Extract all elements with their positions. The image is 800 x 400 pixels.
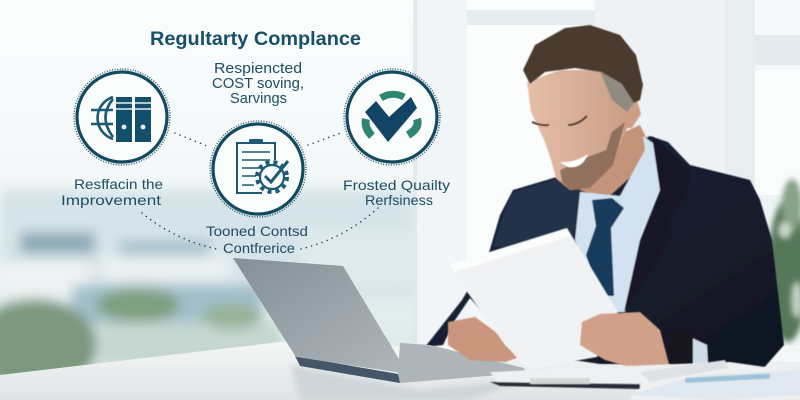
- watch: [670, 331, 693, 367]
- ear: [620, 96, 641, 128]
- businessman: [425, 25, 784, 370]
- lapel: [624, 136, 690, 312]
- icon: clipboard and gear check: [210, 121, 306, 217]
- label: improvement: [61, 176, 163, 208]
- title: Regultarty Complance: [150, 28, 361, 50]
- label: quality: [343, 177, 450, 208]
- label: conference: Contfrerice: [223, 240, 295, 256]
- label: improvement: Improvement: [61, 192, 161, 208]
- label: quality: Rerfsiness: [365, 192, 433, 208]
- left hand: [448, 317, 517, 362]
- laptop base: [398, 343, 525, 383]
- laptop: [233, 258, 525, 383]
- document: [412, 225, 618, 369]
- tie: [586, 198, 624, 296]
- desk: [0, 342, 800, 400]
- plant: [768, 179, 800, 342]
- text block: cost savings: Sarvings: [230, 91, 287, 107]
- label: conference: [206, 223, 308, 256]
- label: quality: Frosted Quailty: [343, 177, 450, 193]
- label: conference: Tooned Contsd: [206, 223, 308, 239]
- desk items: [490, 360, 800, 400]
- icon: check with arrows: [344, 69, 440, 165]
- right hand: [580, 312, 670, 373]
- smile: [560, 154, 588, 167]
- laptop lid: [233, 258, 408, 374]
- suit jacket: [425, 136, 784, 370]
- icon: globe and binders: [74, 69, 170, 165]
- text block: cost savings: [212, 61, 304, 107]
- text block: cost savings: COST soving,: [212, 76, 304, 92]
- beard: [560, 122, 625, 190]
- label: improvement: Resffacin the: [74, 176, 163, 192]
- left shoulder panel: [493, 172, 582, 247]
- text block: cost savings: Respiencted: [214, 61, 302, 77]
- laptop shadow: [290, 365, 530, 400]
- hair: [523, 25, 643, 103]
- shirt: [575, 136, 660, 312]
- connector: dotted lines: [142, 133, 378, 249]
- head: [527, 70, 634, 190]
- neck: [580, 125, 655, 200]
- shirt cuff: [690, 337, 708, 364]
- eyes: [532, 116, 587, 125]
